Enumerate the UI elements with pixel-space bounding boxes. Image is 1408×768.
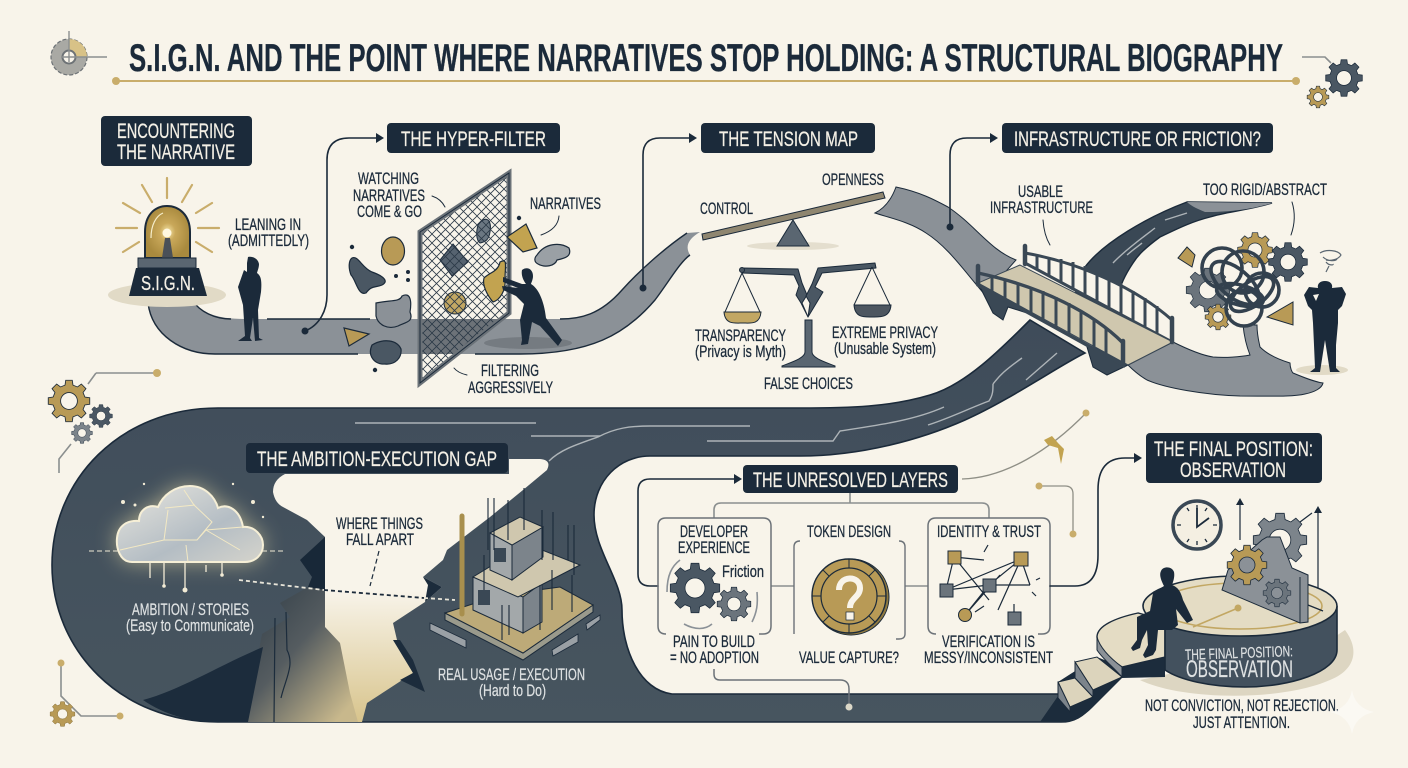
icon: header dial xyxy=(51,31,107,75)
label: narratives xyxy=(530,194,601,235)
heading: infrastructure or friction: INFRASTRUCTURE OR FRICTION? xyxy=(1014,127,1261,151)
arrows: upward xyxy=(1236,498,1322,590)
pedestal title: OBSERVATION xyxy=(1186,656,1293,683)
gray road: bridge to friction xyxy=(1128,325,1323,396)
icon: messy network xyxy=(940,545,1040,625)
label: leaning in xyxy=(228,215,309,250)
narrative shapes left of filter xyxy=(344,237,411,372)
dark road faded end xyxy=(1187,202,1272,212)
right cliff shadows xyxy=(393,577,442,692)
label: where things fall apart xyxy=(336,514,423,586)
label: false choices: FALSE CHOICES xyxy=(764,374,853,393)
icon: gear bottom left xyxy=(50,660,124,726)
icon: gears left xyxy=(48,369,161,473)
label: watching narratives: COME & GO xyxy=(357,202,422,221)
stairs xyxy=(1058,657,1122,712)
road lane markings xyxy=(355,213,1187,461)
label: where things fall apart: WHERE THINGS xyxy=(336,514,423,533)
panel: token design xyxy=(794,522,905,667)
title header xyxy=(51,31,1362,108)
arrow: to unresolved layers xyxy=(638,474,742,586)
label: watching narratives: WATCHING xyxy=(358,169,419,188)
label: transparency: TRANSPARENCY xyxy=(695,326,786,345)
label: closing statement xyxy=(1145,696,1339,732)
heading: the hyper-filter: THE HYPER-FILTER xyxy=(401,127,546,151)
gap dotted line xyxy=(239,580,455,600)
icon: person leaning in xyxy=(238,257,263,341)
label: real usage execution: (Hard to Do) xyxy=(479,681,546,700)
heading: the final position: OBSERVATION xyxy=(1180,458,1286,482)
panel: developer experience: EXPERIENCE xyxy=(678,538,750,557)
pedestal shadow xyxy=(1140,630,1353,696)
icon: hyper-filter fence xyxy=(420,173,510,383)
cliff cracks xyxy=(274,612,290,722)
cylinder top xyxy=(1143,576,1337,636)
heading: the tension map xyxy=(701,123,875,153)
label: extreme privacy xyxy=(832,323,938,358)
dark road: upper section beyond bridge xyxy=(1075,202,1272,300)
label: extreme privacy: (Unusable System) xyxy=(834,339,936,358)
heading: the final position xyxy=(1146,433,1322,483)
panel: developer experience: DEVELOPER xyxy=(680,522,748,541)
panel: developer experience: PAIN TO BUILD xyxy=(673,632,755,651)
label: too rigid abstract xyxy=(1203,180,1327,235)
label: filtering aggressively xyxy=(454,361,553,397)
icon: S.I.G.N. siren xyxy=(108,178,226,307)
far railing xyxy=(1025,253,1172,342)
icon: question coin xyxy=(812,559,889,635)
lower step xyxy=(1097,613,1165,667)
label: usable infrastructure: USABLE xyxy=(1018,182,1063,201)
panel: developer experience: Friction xyxy=(722,562,764,581)
heading: encountering the narrative: THE NARRATIVE xyxy=(117,140,235,164)
label: watching narratives: NARRATIVES xyxy=(353,186,425,205)
heading: encountering the narrative: ENCOUNTERING xyxy=(117,119,235,143)
heading: the unresolved layers: THE UNRESOLVED LAYERS xyxy=(753,468,948,492)
label: usable infrastructure: INFRASTRUCTURE xyxy=(990,198,1093,217)
label: leaning in: (ADMITTEDLY) xyxy=(228,231,309,250)
icon: ambition cloud xyxy=(89,483,284,592)
bridge deck xyxy=(978,265,1173,365)
heading: the tension map: THE TENSION MAP xyxy=(719,127,858,151)
label: transparency: (Privacy is Myth) xyxy=(695,342,786,361)
label: real usage execution xyxy=(438,665,585,700)
big dark road loop xyxy=(52,320,1092,722)
label: where things fall apart: FALL APART xyxy=(346,530,414,549)
top gray road: encountering to tension xyxy=(148,232,700,354)
icon: clock xyxy=(1173,501,1221,549)
label: real usage execution: REAL USAGE / EXECUTION xyxy=(438,665,585,684)
panel: identity and trust: MESSY/INCONSISTENT xyxy=(924,648,1053,667)
icon: unfinished building xyxy=(430,488,600,660)
icon: confused person xyxy=(1296,251,1348,375)
label: narratives: NARRATIVES xyxy=(530,194,601,213)
arrow: to infrastructure xyxy=(946,133,998,230)
left cliff face xyxy=(246,560,358,722)
gold decorative connectors xyxy=(962,410,1090,538)
heading: the final position: THE FINAL POSITION: xyxy=(1154,437,1313,461)
label: filtering aggressively: FILTERING xyxy=(481,361,539,380)
connector: layers to road xyxy=(714,669,852,710)
pier under far rail xyxy=(1075,280,1117,330)
abutments xyxy=(980,287,1128,375)
heading: the unresolved layers xyxy=(743,465,958,493)
panel: identity and trust: IDENTITY & TRUST xyxy=(937,522,1041,541)
icon: tilted seesaw xyxy=(702,192,885,250)
heading: the hyper-filter xyxy=(387,123,560,153)
chasm gap xyxy=(273,459,548,722)
gray road: tension to bridge xyxy=(875,187,1016,295)
icon: S.I.G.N. siren: S.I.G.N. xyxy=(141,273,195,295)
heading: encountering the narrative xyxy=(101,116,252,166)
narrative shapes right of filter xyxy=(484,216,570,302)
arrow: to final position xyxy=(1050,453,1142,586)
arrow: to hyper-filter xyxy=(302,133,384,334)
label: openness: OPENNESS xyxy=(822,170,884,189)
icon: machine gears xyxy=(1222,513,1323,623)
panel: token design: TOKEN DESIGN xyxy=(807,522,891,541)
panel: identity and trust: VERIFICATION IS xyxy=(942,632,1035,651)
icon: observation pedestal xyxy=(1040,513,1353,722)
label: watching narratives xyxy=(353,169,445,221)
heading: ambition execution gap: THE AMBITION-EXECUTION GAP xyxy=(257,447,497,471)
stairs dark base xyxy=(1040,657,1165,722)
pedestal caption: THE FINAL POSITION: xyxy=(1185,643,1293,664)
foreground dark rock xyxy=(143,647,263,722)
near railing xyxy=(978,273,1123,365)
label: ambition stories: AMBITION / STORIES xyxy=(132,600,249,619)
label: too rigid abstract: TOO RIGID/ABSTRACT xyxy=(1203,180,1327,199)
left cliff shadow xyxy=(300,537,325,590)
bridge posts xyxy=(978,246,1172,365)
panel: developer experience: = NO ADOPTION xyxy=(670,648,759,667)
layer tree connectors xyxy=(714,493,989,586)
label: extreme privacy: EXTREME PRIVACY xyxy=(832,323,938,342)
panel: token design: VALUE CAPTURE? xyxy=(799,648,899,667)
heading: ambition execution gap xyxy=(246,443,508,473)
label: filtering aggressively: AGGRESSIVELY xyxy=(468,378,553,397)
panel: developer experience xyxy=(658,518,771,667)
icon: person pushing filter xyxy=(484,268,572,349)
label: ambition stories: (Easy to Communicate) xyxy=(126,616,254,635)
icon: friction gears xyxy=(667,560,757,628)
label: ambition stories xyxy=(126,600,254,635)
heading: infrastructure or friction xyxy=(1002,123,1273,153)
cylinder side xyxy=(1165,607,1337,687)
label: leaning in: LEANING IN xyxy=(235,215,301,234)
label: control: CONTROL xyxy=(700,199,753,218)
label: transparency xyxy=(695,326,786,361)
arrow: to tension map xyxy=(640,133,697,292)
icon: broken scales xyxy=(724,263,891,367)
icon: tangled gears xyxy=(1178,233,1307,330)
title underline xyxy=(112,77,1300,85)
icon: seated observer xyxy=(1131,567,1193,658)
watermark sparkle xyxy=(1330,690,1374,734)
label: closing statement: JUST ATTENTION. xyxy=(1193,713,1290,732)
label: usable infrastructure xyxy=(990,182,1093,245)
icon: bridge xyxy=(978,246,1173,375)
icon: header gears xyxy=(1302,57,1362,108)
panel: identity and trust xyxy=(924,518,1053,667)
